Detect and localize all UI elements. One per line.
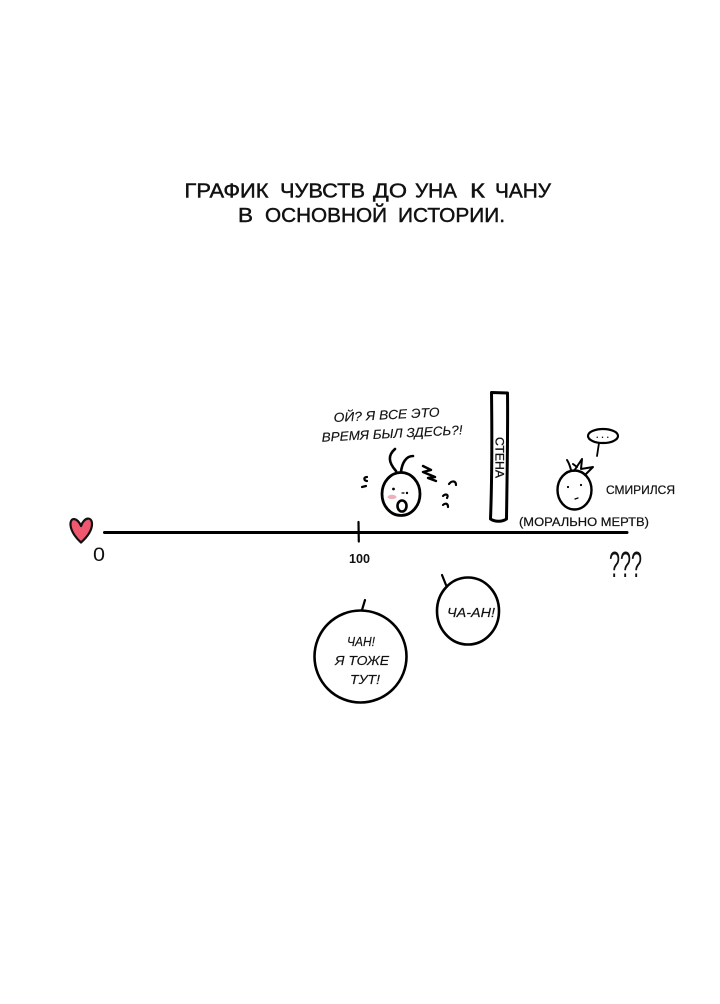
wall <box>490 392 508 521</box>
title: ЧУВСТВ <box>280 180 365 202</box>
speech text: surprised character: ОЙ? Я ВСЕ ЭТО <box>333 404 440 425</box>
title: УНА <box>415 180 457 202</box>
label: resigned: СМИРИЛСЯ <box>606 485 675 497</box>
label: unknown end: ??? <box>609 544 642 585</box>
speech bubble: large: Я ТОЖЕ <box>334 653 389 668</box>
character: surprised with blush <box>362 449 456 516</box>
title <box>184 180 552 227</box>
speech bubble: small <box>437 575 499 644</box>
icon: heart at zero <box>70 519 92 542</box>
label: morally dead: (МОРАЛЬНО МЕРТВ) <box>519 517 649 529</box>
speech text: surprised character <box>320 402 463 445</box>
speech bubble: large: ЧАН! <box>347 634 375 649</box>
speech bubble: large <box>314 600 406 702</box>
speech bubble: small: ЧА-АН! <box>447 605 495 620</box>
speech bubble: large: ТУТ! <box>350 672 380 687</box>
character: resigned <box>558 459 593 510</box>
title: ЧАНУ <box>495 180 552 202</box>
wall label: СТЕНА <box>492 437 506 478</box>
title: В <box>238 204 253 227</box>
title: ДО <box>373 180 407 202</box>
title: ОСНОВНОЙ <box>265 203 387 227</box>
speech text: surprised character: ВРЕМЯ БЫЛ ЗДЕСЬ?! <box>321 422 463 445</box>
title: ИСТОРИИ. <box>398 204 505 227</box>
tick: 100 <box>357 522 360 542</box>
timeline axis <box>104 531 627 534</box>
thought bubble: ... <box>596 430 609 440</box>
thought bubble <box>588 429 618 456</box>
label: zero: 0 <box>93 545 105 566</box>
label: 100: 100 <box>349 551 370 566</box>
title: К <box>470 180 485 202</box>
title: ГРАФИК <box>184 180 269 202</box>
